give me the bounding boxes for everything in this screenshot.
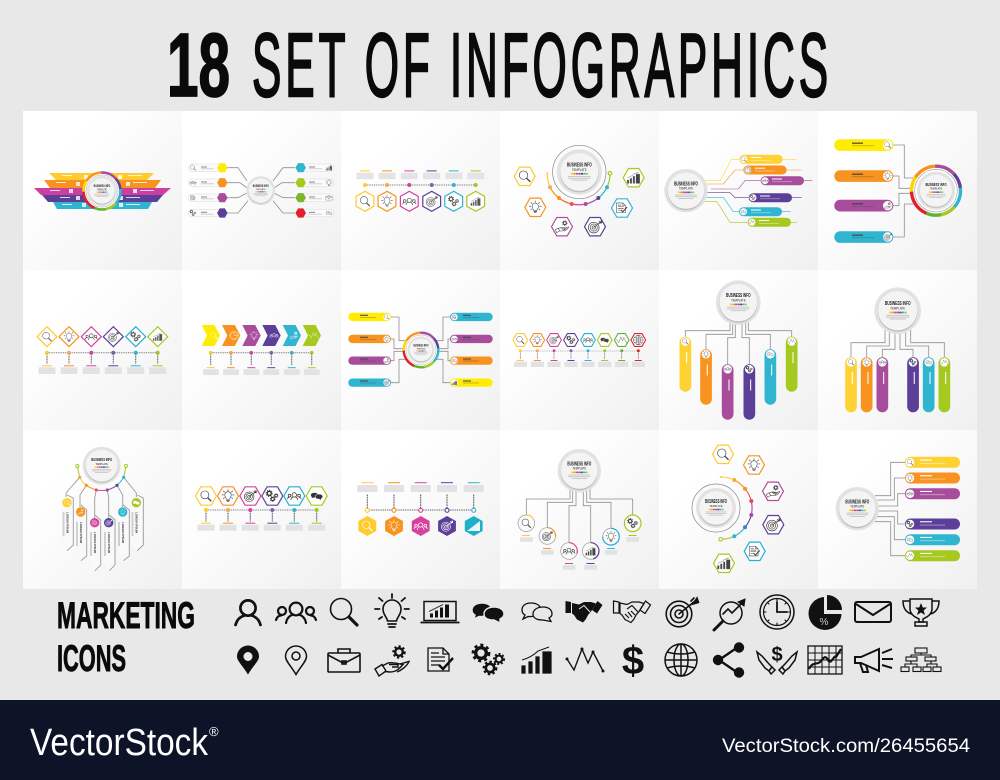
icon: clock	[760, 595, 794, 629]
hexagon icons	[362, 520, 480, 531]
hub	[692, 484, 740, 532]
title	[167, 16, 832, 116]
timeline	[365, 494, 476, 512]
footer logo: ®	[209, 724, 219, 739]
hub: TEMPLATE	[256, 188, 266, 191]
panel: 8 chevrons	[182, 270, 341, 430]
footer logo: VectorStock	[30, 722, 209, 764]
hub: BUSINESS INFO	[674, 181, 698, 187]
pendant tags: LOREM IPSUM	[93, 532, 97, 554]
icon: dollar	[622, 639, 644, 683]
labels	[203, 367, 320, 375]
icon: magnifier	[330, 598, 357, 625]
progress circles	[518, 515, 641, 559]
icon: light bulb	[375, 594, 409, 627]
panel: 3 hexagon timeline	[341, 111, 500, 270]
hub: TEMPLATE	[679, 187, 694, 191]
hub: TEMPLATE	[890, 307, 906, 311]
hub: TEMPLATE	[930, 187, 942, 191]
bars	[680, 337, 798, 420]
panel: 11 hanging bars staggered	[659, 270, 818, 430]
hub: BUSINESS INFO	[885, 301, 911, 307]
left pills	[188, 163, 228, 218]
hexagon icons	[360, 195, 480, 206]
panel: 7 diamond timeline	[23, 270, 182, 430]
hub	[901, 156, 971, 225]
heading: marketing icons	[57, 595, 195, 679]
connectors	[875, 462, 905, 556]
labels	[514, 360, 645, 367]
hub: BUSINESS INFO	[845, 499, 869, 505]
hexagons	[196, 487, 327, 505]
hub	[397, 326, 445, 374]
hub: TEMPLATE	[710, 504, 722, 508]
hexagon icons	[717, 449, 780, 569]
icon: document check	[428, 648, 453, 671]
icon: outline handshake	[614, 601, 650, 622]
hub: BUSINESS INFO	[253, 184, 269, 188]
hexagons	[712, 445, 784, 572]
icon: laptop chart	[420, 602, 460, 622]
hub: BUSINESS INFO	[726, 293, 751, 299]
icon: gears	[473, 645, 504, 674]
icon: magnifier with arrow	[714, 599, 745, 630]
icon: briefcase	[328, 649, 360, 672]
timeline	[519, 349, 640, 359]
connectors	[685, 322, 792, 364]
hub: BUSINESS INFO	[705, 499, 727, 505]
chevrons	[202, 325, 321, 346]
hub: BUSINESS INFO	[567, 461, 591, 467]
footer image id: VectorStock.com/26455654	[722, 736, 970, 757]
hexagons with icons	[514, 167, 644, 236]
icon: org chart	[901, 648, 941, 672]
icon: line graph	[808, 646, 842, 674]
icon: outline chat	[522, 603, 552, 622]
panel: 4 hexagon arc	[500, 111, 659, 270]
icon: hands with dollar	[757, 644, 797, 674]
hub	[558, 449, 601, 492]
hub: BUSINESS INFO	[414, 344, 429, 348]
hub: TEMPLATE	[96, 462, 108, 466]
hub: TEMPLATE	[572, 168, 587, 172]
hub: TEMPLATE	[97, 188, 107, 191]
filled hexagons	[358, 516, 483, 536]
arc timeline	[719, 476, 753, 541]
arc timeline	[546, 172, 612, 206]
panel: 12 hanging bars level	[818, 270, 977, 430]
labels	[198, 523, 325, 531]
connectors	[893, 145, 915, 237]
icon: trophy	[903, 599, 939, 626]
labels	[38, 365, 166, 374]
connectors	[526, 489, 633, 543]
icon: filled pin	[237, 646, 259, 674]
connectors	[851, 330, 944, 357]
connectors	[391, 317, 451, 383]
timeline	[209, 351, 314, 365]
hub	[874, 287, 921, 334]
icon: zigzag line	[566, 648, 604, 672]
labels	[357, 482, 484, 492]
timeline	[45, 351, 160, 364]
heading: marketing icons: ICONS	[57, 638, 126, 679]
connectors	[698, 159, 812, 222]
icon: rising bars	[521, 647, 552, 674]
icon: person	[236, 600, 260, 625]
hub	[83, 447, 121, 485]
panel: 9 eight pills and ring	[341, 270, 500, 430]
icon: megaphone	[855, 649, 893, 672]
circle icons	[522, 519, 638, 555]
diamond icons	[43, 331, 162, 341]
panel: 18 six pills	[818, 430, 977, 589]
panel: 2 mind map	[182, 111, 341, 270]
hub	[664, 169, 708, 212]
icon: share	[713, 642, 744, 678]
bars	[845, 357, 950, 412]
hub	[716, 280, 761, 325]
dotted timeline	[363, 183, 478, 187]
hub: BUSINESS INFO	[91, 457, 112, 463]
icon: filled chat	[472, 603, 504, 623]
pills	[348, 313, 493, 387]
hub	[553, 145, 606, 199]
hexagons	[356, 191, 485, 211]
pills	[905, 457, 960, 561]
panel: 14 hexagon timeline down	[182, 430, 341, 589]
heading: marketing icons: MARKETING	[57, 595, 195, 636]
hexagons	[513, 334, 646, 346]
panel: 15 filled hexagon timeline	[341, 430, 500, 589]
diamonds	[37, 327, 168, 347]
pendant tags: LOREM IPSUM	[107, 532, 111, 554]
timeline	[204, 508, 319, 522]
label boxes	[356, 170, 484, 179]
pendant tags	[62, 477, 143, 571]
pills	[739, 155, 804, 227]
hub: BUSINESS INFO	[567, 162, 592, 168]
pendant tags: LOREM IPSUM	[135, 512, 139, 534]
pendant tags: LOREM IPSUM	[79, 522, 83, 544]
icon: target	[666, 598, 698, 627]
connectors	[227, 168, 295, 213]
hub	[246, 176, 275, 205]
icon: pie chart	[809, 595, 842, 630]
panel: 16 circle tree	[500, 430, 659, 589]
icon: filled handshake	[566, 601, 602, 622]
title: 18	[167, 16, 230, 116]
colour bands	[34, 173, 171, 209]
labels	[520, 535, 639, 570]
panel: 1 banded circle	[23, 111, 182, 270]
right pills	[295, 163, 334, 218]
hub: BUSINESS INFO	[925, 182, 947, 188]
hub: BUSINESS INFO	[94, 184, 110, 188]
icon: people	[276, 603, 316, 623]
panel: 10 eight hexagon timeline	[500, 270, 659, 430]
hub: TEMPLATE	[572, 467, 587, 471]
hub: TEMPLATE	[850, 505, 865, 509]
hub	[836, 487, 879, 530]
icon: outline pin	[286, 646, 306, 674]
panel: 6 four pills and ring	[818, 111, 977, 270]
hub: TEMPLATE	[731, 299, 746, 303]
panel: 17 side arc hexagons	[659, 430, 818, 589]
hexagon icons	[201, 490, 323, 502]
hexagon icons	[517, 335, 643, 345]
footer bar	[0, 700, 1000, 780]
icon: hand with gear	[375, 646, 409, 676]
arc timeline	[76, 464, 128, 492]
pendant tags: LOREM IPSUM	[66, 512, 70, 534]
icon: mail	[855, 602, 891, 622]
pills	[834, 139, 893, 243]
panel: 13 arc with pendants	[23, 430, 182, 589]
pendant tags: LOREM IPSUM	[121, 522, 125, 544]
panel: 5 circuit pills	[659, 111, 818, 270]
hub	[76, 165, 128, 217]
icon: globe	[665, 644, 697, 676]
hub: TEMPLATE	[417, 347, 426, 350]
